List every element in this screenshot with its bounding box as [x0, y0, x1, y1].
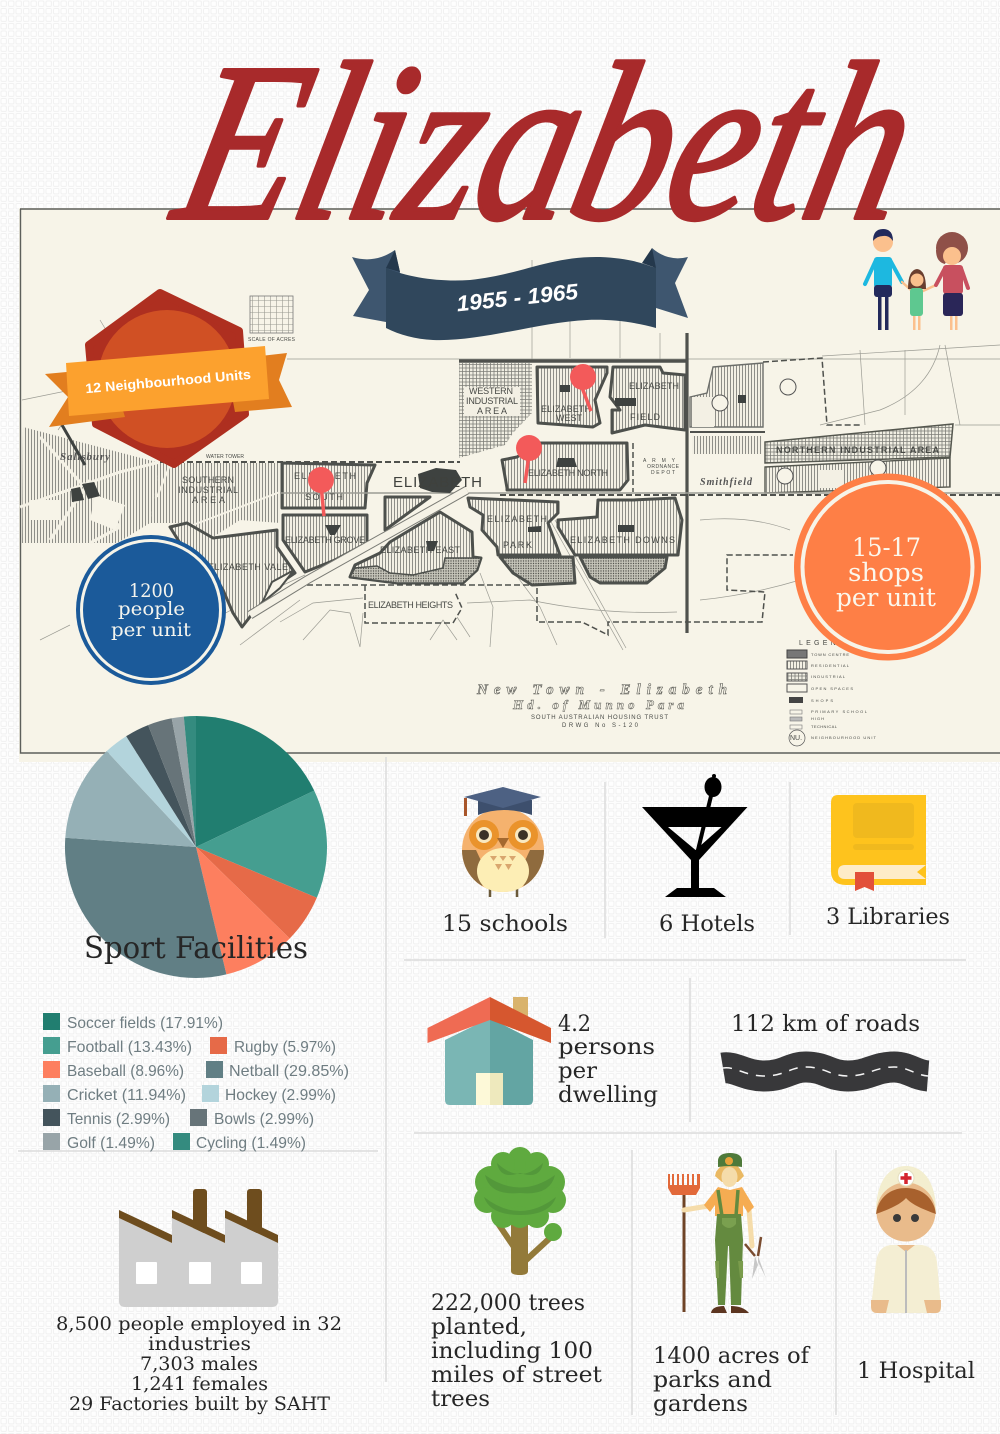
- factory employment text: 29 Factories built by SAHT: [69, 1394, 331, 1415]
- map legend: PRIMARY SCHOOL: [811, 709, 868, 714]
- pin 1: [570, 364, 596, 411]
- pie chart legend: [43, 1013, 349, 1152]
- icon: gardener: [668, 1153, 766, 1313]
- man: [865, 229, 902, 330]
- panel: historic map of Elizabeth: [19, 208, 1000, 762]
- icon: house: [428, 997, 551, 1105]
- map legend: NU.: [790, 735, 802, 742]
- pie chart legend: Cricket (11.94%): [67, 1087, 186, 1104]
- scale of acres grid: [248, 296, 296, 343]
- icon: winding road: [723, 1067, 928, 1076]
- callout: 15-17 shops per unit: [794, 474, 981, 660]
- icon: yellow book: [831, 795, 926, 891]
- pin 2: [516, 435, 542, 483]
- icon: tree: [474, 1147, 566, 1275]
- map legend: SHOPS: [811, 698, 833, 703]
- pie chart: sport facilities: [65, 716, 327, 978]
- map place labels: ELIZABETH GROVE: [285, 535, 365, 545]
- map place labels: AREA: [192, 495, 225, 505]
- chart title: Sport Facilities: [84, 931, 308, 966]
- map legend: TOWN CENTRE: [811, 652, 849, 657]
- map title block: Hd. of Munno Para: [512, 697, 684, 712]
- map place labels: AREA: [477, 406, 507, 416]
- ribbon: 1955 - 1965: [352, 248, 688, 340]
- map title block: New Town - Elizabeth: [476, 682, 727, 698]
- callout: 15-17 shops per unit: 15-17: [852, 533, 921, 562]
- text: 3 Libraries: 3 Libraries: [826, 905, 950, 930]
- factory employment text: 7,303 males: [140, 1354, 258, 1375]
- map place labels: ELIZABETH: [487, 514, 547, 524]
- map pins: [308, 364, 596, 516]
- map place labels: WEST: [556, 413, 582, 423]
- map place labels: ARMY: [643, 458, 676, 464]
- map place labels: [60, 381, 940, 610]
- callout: 15-17 shops per unit: per unit: [836, 583, 936, 612]
- text: parks and gardens: gardens: [653, 1392, 748, 1417]
- map title block: SOUTH AUSTRALIAN HOUSING TRUST: [531, 715, 668, 721]
- text: trees planted: planted,: [431, 1315, 527, 1340]
- badge: 12 Neighbourhood Units: 12 Neighbourhood Units: [85, 367, 251, 396]
- text: 4.2 persons per dwelling: persons: [558, 1035, 655, 1060]
- text: parks and gardens: [653, 1344, 811, 1417]
- map title block: DRWG No S-120: [562, 723, 639, 729]
- map legend: NEIGHBOURHOOD UNIT: [811, 735, 877, 740]
- text: parks and gardens: 1400 acres of: [653, 1344, 811, 1369]
- callout: 1200 people per unit: people: [118, 598, 185, 620]
- map legend: [787, 640, 877, 746]
- map place labels: ELIZABETH DOWNS: [570, 535, 675, 545]
- pie chart legend: Hockey (2.99%): [225, 1087, 336, 1104]
- child: [902, 269, 936, 330]
- pie chart legend: Bowls (2.99%): [214, 1111, 314, 1128]
- map place labels: NORTHERN INDUSTRIAL AREA: [776, 445, 940, 455]
- badge: 12 Neighbourhood Units: [45, 293, 292, 464]
- pie chart legend: Baseball (8.96%): [67, 1063, 184, 1080]
- map place labels: ELIZABETH EAST: [380, 545, 460, 555]
- family icon: [865, 229, 968, 330]
- callout: 1200 people per unit: [76, 535, 226, 685]
- map place labels: ELIZABETH VALE: [208, 562, 288, 572]
- map street plan: [20, 260, 1000, 650]
- factory employment text: industries: [148, 1334, 251, 1355]
- map place labels: ELIZABETH HEIGHTS: [368, 600, 453, 610]
- map place labels: ELIZABETH: [393, 474, 482, 491]
- pie chart legend: Golf (1.49%): [67, 1135, 155, 1152]
- factory employment text: 8,500 people employed in 32: [56, 1314, 342, 1335]
- text: 4.2 persons per dwelling: per: [558, 1059, 597, 1084]
- map place labels: Smithfield: [700, 477, 753, 488]
- factory employment text: [56, 1314, 342, 1415]
- text: trees planted: 222,000 trees: [431, 1291, 585, 1316]
- icon: owl with graduation cap: [458, 787, 548, 897]
- pie chart legend: Soccer fields (17.91%): [67, 1015, 223, 1032]
- callout: 1200 people per unit: 1200: [129, 580, 174, 602]
- map place labels: ORDNANCE: [647, 464, 680, 470]
- map place labels: SOUTH: [305, 492, 343, 502]
- pin 3: [308, 467, 334, 516]
- text: 1 Hospital: 1 Hospital: [857, 1359, 975, 1384]
- text: 15 schools: 15 schools: [442, 912, 568, 937]
- pie chart legend: Netball (29.85%): [229, 1063, 349, 1080]
- map place labels: ELIZABETH: [541, 404, 591, 414]
- map place labels: ELIZABETH: [294, 471, 356, 481]
- ribbon: 1955 - 1965: 1955 - 1965: [455, 279, 580, 316]
- map legend: INDUSTRIAL: [811, 674, 846, 679]
- map legend: TECHNICAL: [811, 724, 838, 729]
- callout: 15-17 shops per unit: shops: [848, 558, 924, 587]
- pie chart legend: Tennis (2.99%): [67, 1111, 170, 1128]
- map place labels: INDUSTRIAL: [178, 485, 238, 495]
- map place labels: Salisbury: [60, 451, 110, 463]
- map legend: OPEN SPACES: [811, 686, 853, 691]
- pie chart legend: Cycling (1.49%): [196, 1135, 306, 1152]
- text: 6 Hotels: 6 Hotels: [659, 912, 755, 937]
- map place labels: FIELD: [630, 412, 660, 422]
- icon: nurse: [871, 1166, 941, 1313]
- callout: 1200 people per unit: per unit: [111, 619, 191, 641]
- map place labels: DEPOT: [651, 470, 675, 476]
- map place labels: INDUSTRIAL: [466, 396, 518, 406]
- map place labels: PARK: [503, 540, 532, 550]
- factory employment text: 1,241 females: [131, 1374, 268, 1395]
- map legend: HIGH: [811, 716, 824, 721]
- map paper: [19, 208, 1000, 762]
- text: trees planted: including 100: [431, 1339, 593, 1364]
- text: 4.2 persons per dwelling: [558, 1012, 658, 1108]
- map title block: [476, 682, 727, 729]
- map legend: LEGEND: [799, 640, 844, 647]
- text: 4.2 persons per dwelling: dwelling: [558, 1083, 658, 1108]
- pie chart legend: Rugby (5.97%): [234, 1039, 336, 1056]
- section dividers: [18, 757, 966, 1415]
- text: trees planted: miles of street: [431, 1363, 602, 1388]
- text: 4.2 persons per dwelling: 4.2: [558, 1012, 591, 1037]
- scale of acres grid: SCALE OF ACRES: [248, 337, 296, 343]
- text: trees planted: [431, 1291, 602, 1412]
- woman: [936, 232, 968, 330]
- text: 112 km of roads: 112 km of roads: [731, 1012, 920, 1037]
- map place labels: SOUTHERN: [182, 475, 234, 485]
- map place labels: WESTERN: [469, 386, 513, 396]
- text: parks and gardens: parks and: [653, 1368, 772, 1393]
- pie chart legend: Football (13.43%): [67, 1039, 192, 1056]
- icon: cocktail glass: [642, 774, 748, 897]
- text: trees planted: trees: [431, 1387, 490, 1412]
- icon: factory: [119, 1189, 278, 1307]
- map place labels: WATER TOWER: [206, 454, 244, 460]
- map place labels: ELIZABETH NORTH: [528, 468, 608, 478]
- map legend: RESIDENTIAL: [811, 663, 850, 668]
- map place labels: ELIZABETH: [629, 381, 679, 391]
